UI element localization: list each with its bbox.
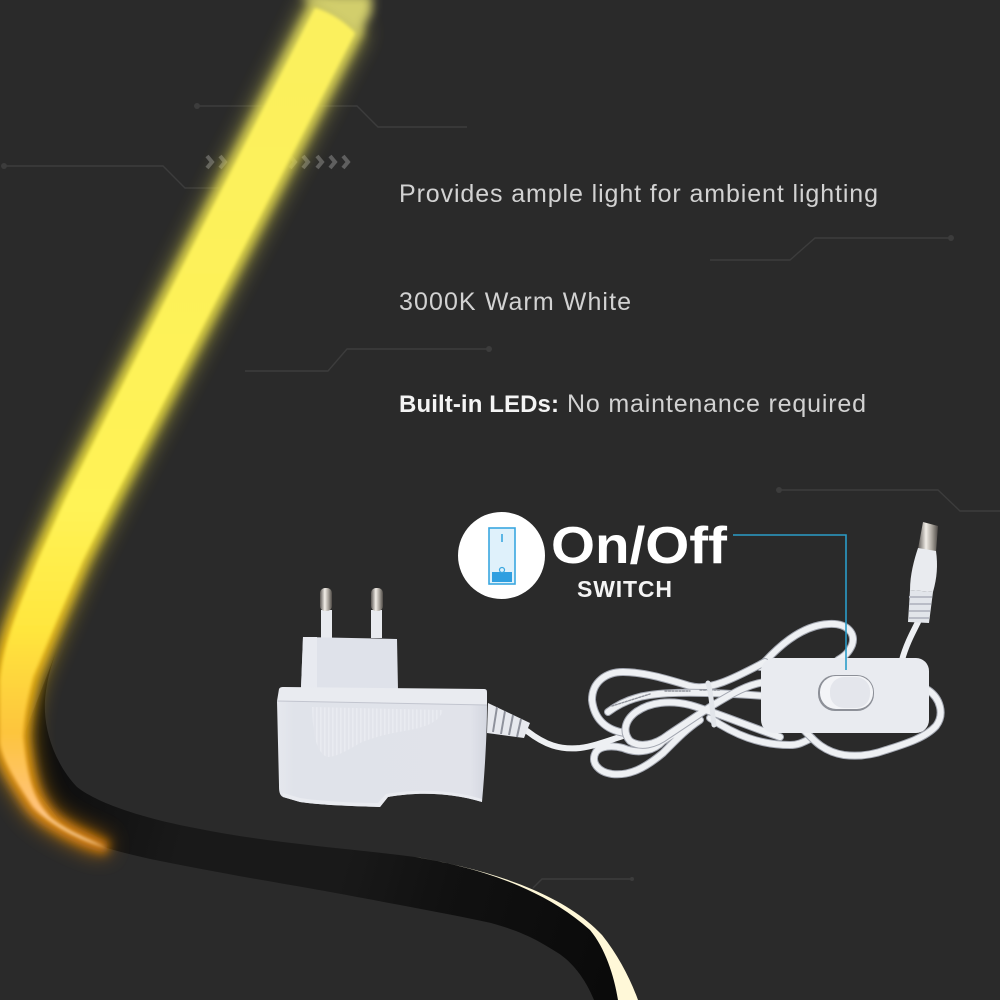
plug base [301, 637, 398, 690]
cable: lower lead [710, 718, 812, 745]
cream lit edge at bottom of strip [415, 857, 638, 1000]
feature text: built-in LEDs: Built-in LEDs: [399, 391, 559, 418]
chevron row [207, 156, 348, 168]
strip core [0, 8, 355, 848]
cables [527, 622, 941, 774]
adapter housing [277, 701, 487, 807]
leader line [733, 535, 846, 670]
inline switch [761, 658, 929, 733]
icon: rocker switch badge [458, 512, 545, 599]
circuit line: bottom [533, 877, 634, 888]
cable: right loop [804, 690, 941, 756]
cable: from adapter [527, 731, 626, 748]
circuit line: lower right [776, 487, 1000, 511]
circuit line: top [194, 103, 467, 127]
strip near glow [0, 8, 355, 848]
circuit line: right of text [710, 235, 954, 260]
cable: inner loop [625, 682, 780, 745]
glowing yellow LED strip [0, 0, 372, 848]
strain relief [487, 703, 530, 738]
heading: On/Off: On/Off [551, 517, 728, 575]
strip wide glow [0, 8, 355, 848]
circuit line: mid [245, 346, 492, 371]
power adapter [277, 588, 530, 807]
callout: on/off switch [458, 512, 846, 670]
rocker button [818, 675, 874, 711]
feature text: built-in LEDs [399, 390, 866, 418]
cable: printed end [608, 690, 765, 712]
cable tie [708, 683, 714, 725]
feature text: built-in LEDs: No maintenance required [567, 390, 866, 418]
circuit line: left [1, 163, 220, 188]
ribbed grip panel [312, 707, 443, 757]
strip end cap [300, 0, 372, 36]
cable: bottom loop [594, 720, 700, 774]
subheading: SWITCH: SWITCH [577, 576, 672, 602]
decorative circuit lines [1, 103, 1000, 888]
cable: big left loop [592, 662, 765, 733]
plug pins [320, 588, 383, 638]
cable: connector lead [902, 622, 918, 660]
feature text: ambient lighting: Provides ample light for ambient lighting [399, 180, 878, 208]
feature text: colour temperature: 3000K Warm White [399, 288, 631, 316]
DC barrel connector [908, 522, 938, 623]
cable: top loop [760, 624, 853, 667]
black LED strip body [23, 647, 618, 1000]
